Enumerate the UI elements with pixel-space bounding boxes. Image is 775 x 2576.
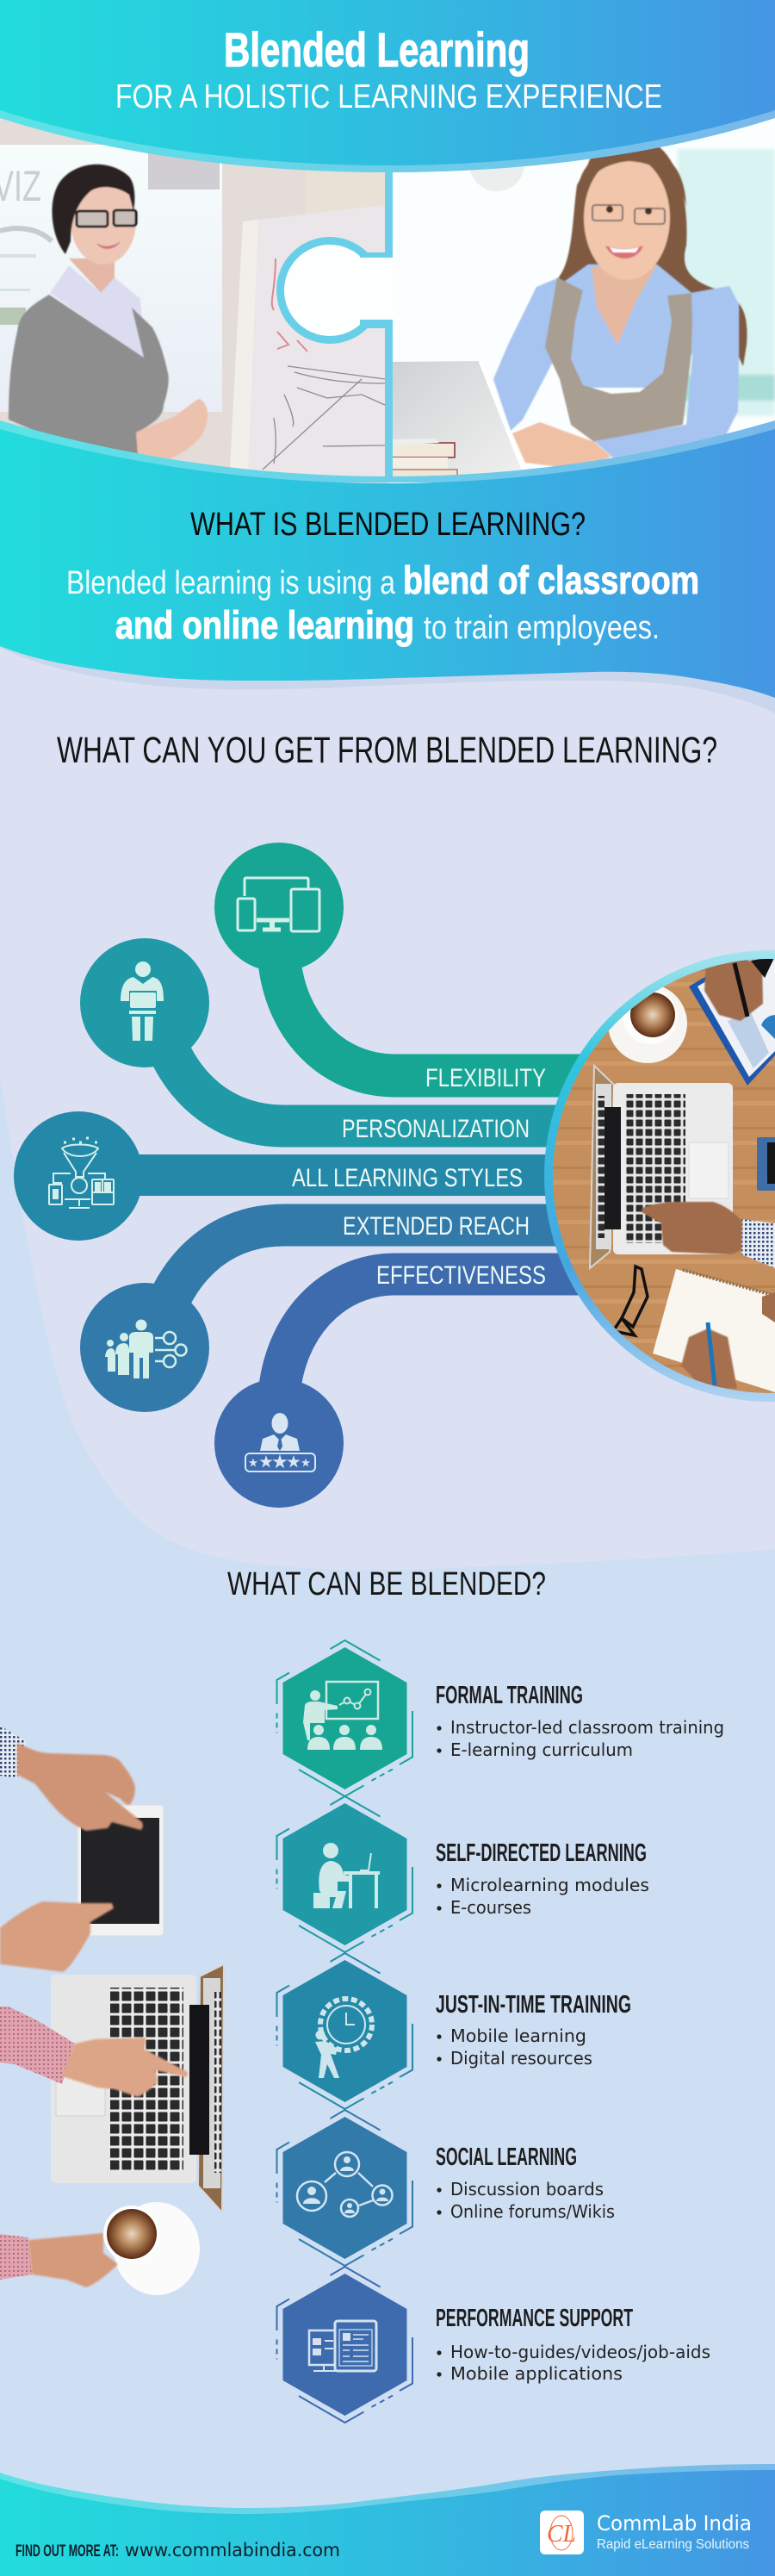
ribbon: all learning styles bbox=[14, 1111, 568, 1241]
text: self-directed learning: SELF-DIRECTED LEARNING bbox=[436, 1839, 647, 1867]
glasses bbox=[613, 1266, 648, 1335]
photo cutout: hands with tablet, laptop and coffee bbox=[0, 1726, 224, 2295]
laptop bbox=[391, 361, 524, 476]
item: performance support bbox=[277, 2267, 710, 2423]
icon: rated employee bbox=[245, 1413, 315, 1472]
icon: seated person at desk bbox=[313, 1843, 380, 1908]
item: just-in-time training bbox=[277, 1953, 631, 2109]
heading: what can be blended: WHAT CAN BE BLENDED? bbox=[227, 1566, 546, 1602]
definition text: to train employees. bbox=[424, 610, 660, 646]
definition text: blend of classroom bbox=[403, 558, 699, 602]
text: social learning: Online forums/Wikis bbox=[450, 2201, 615, 2222]
logo: CommLab India: Rapid eLearning Solutions bbox=[597, 2537, 749, 2552]
item: formal training bbox=[277, 1640, 724, 1796]
text: just-in-time training: JUST-IN-TIME TRAINING bbox=[436, 1991, 631, 2019]
teacher figure bbox=[9, 165, 208, 459]
ribbon: personalization bbox=[80, 938, 568, 1143]
logo: CommLab India: CommLab India bbox=[597, 2511, 752, 2536]
footer band bbox=[0, 2464, 775, 2576]
ribbon: effectiveness bbox=[214, 1261, 594, 1508]
icon: growing people bbox=[105, 1320, 186, 1378]
text: formal training: Instructor-led classroom training bbox=[450, 1717, 724, 1738]
hexagon list bbox=[277, 1640, 724, 2423]
text: performance support bbox=[436, 2305, 710, 2384]
icon: screens with resources bbox=[309, 2321, 376, 2371]
text: social learning: SOCIAL LEARNING bbox=[436, 2144, 577, 2171]
books bbox=[390, 439, 457, 478]
photo circle: desk from above bbox=[544, 939, 775, 1404]
notebook with pencil hand bbox=[653, 1269, 775, 1392]
definition text: and online learning bbox=[115, 603, 414, 647]
benefits diagram bbox=[14, 843, 775, 1508]
logo: CommLab India: CL bbox=[547, 2521, 576, 2548]
ribbon: all learning styles: ALL LEARNING STYLES bbox=[292, 1164, 523, 1192]
definition band bbox=[0, 420, 775, 713]
title: Blended Learning bbox=[224, 22, 530, 77]
text: formal training: E-learning curriculum bbox=[450, 1739, 633, 1760]
text: performance support: How-to-guides/videos/job-aids bbox=[450, 2342, 710, 2362]
coffee cup in hand bbox=[0, 2202, 200, 2295]
icon: funnel and devices bbox=[49, 1138, 114, 1208]
laptop with pointing hand bbox=[0, 1964, 224, 2212]
text: formal training: FORMAL TRAINING bbox=[436, 1682, 583, 1709]
coffee on saucer bbox=[608, 984, 687, 1063]
item: self-directed learning bbox=[277, 1796, 649, 1952]
text: just-in-time training bbox=[436, 1991, 631, 2069]
open laptop bbox=[590, 1066, 733, 1268]
find out more bbox=[16, 2540, 340, 2560]
learner figure bbox=[493, 144, 747, 467]
find out more: www.commlabindia.com bbox=[125, 2540, 340, 2560]
item: social learning bbox=[277, 2110, 615, 2266]
text: self-directed learning: Microlearning modules bbox=[450, 1875, 649, 1895]
definition text bbox=[66, 558, 699, 647]
text: formal training bbox=[436, 1682, 724, 1760]
icon: presenter and audience bbox=[303, 1682, 382, 1750]
whiteboard bbox=[230, 205, 385, 478]
puzzle connector bbox=[281, 170, 393, 482]
text: self-directed learning bbox=[436, 1839, 649, 1918]
header band bbox=[0, 0, 775, 172]
text: performance support: PERFORMANCE SUPPORT bbox=[436, 2305, 633, 2332]
calculator bbox=[757, 1137, 775, 1191]
find out more: FIND OUT MORE AT: bbox=[16, 2542, 119, 2560]
photo: online learner bbox=[389, 103, 775, 487]
text: performance support: Mobile applications bbox=[450, 2363, 623, 2384]
heading: what is blended learning: WHAT IS BLENDED LEARNING? bbox=[190, 507, 586, 543]
ribbon: effectiveness: EFFECTIVENESS bbox=[376, 1261, 546, 1290]
ribbon: personalization: PERSONALIZATION bbox=[342, 1115, 530, 1143]
icon: clock gear carried by figure bbox=[315, 1999, 372, 2078]
tablet with two hands bbox=[0, 1726, 164, 1972]
ribbon: extended reach bbox=[80, 1212, 568, 1412]
ribbon: extended reach: EXTENDED REACH bbox=[343, 1212, 530, 1241]
lavender background blob bbox=[0, 638, 775, 1570]
icon: person with laptop bbox=[121, 961, 164, 1041]
hand on keyboard bbox=[642, 1202, 775, 1268]
ribbon: flexibility: FLEXIBILITY bbox=[425, 1064, 546, 1092]
ribbon: flexibility bbox=[214, 843, 594, 1092]
text: social learning bbox=[436, 2144, 615, 2222]
text: self-directed learning: E-courses bbox=[450, 1897, 531, 1918]
text: just-in-time training: Mobile learning bbox=[450, 2025, 586, 2046]
text: just-in-time training: Digital resources bbox=[450, 2048, 592, 2069]
definition text: Blended learning is using a bbox=[66, 565, 396, 601]
text: social learning: Discussion boards bbox=[450, 2179, 604, 2200]
clipboard with writing hand bbox=[689, 959, 775, 1086]
icon: social network bbox=[297, 2152, 393, 2217]
subtitle: FOR A HOLISTIC LEARNING EXPERIENCE bbox=[115, 78, 662, 115]
logo: CommLab India bbox=[540, 2511, 752, 2554]
photo: classroom teacher bbox=[0, 103, 388, 487]
icon: devices bbox=[238, 878, 319, 931]
